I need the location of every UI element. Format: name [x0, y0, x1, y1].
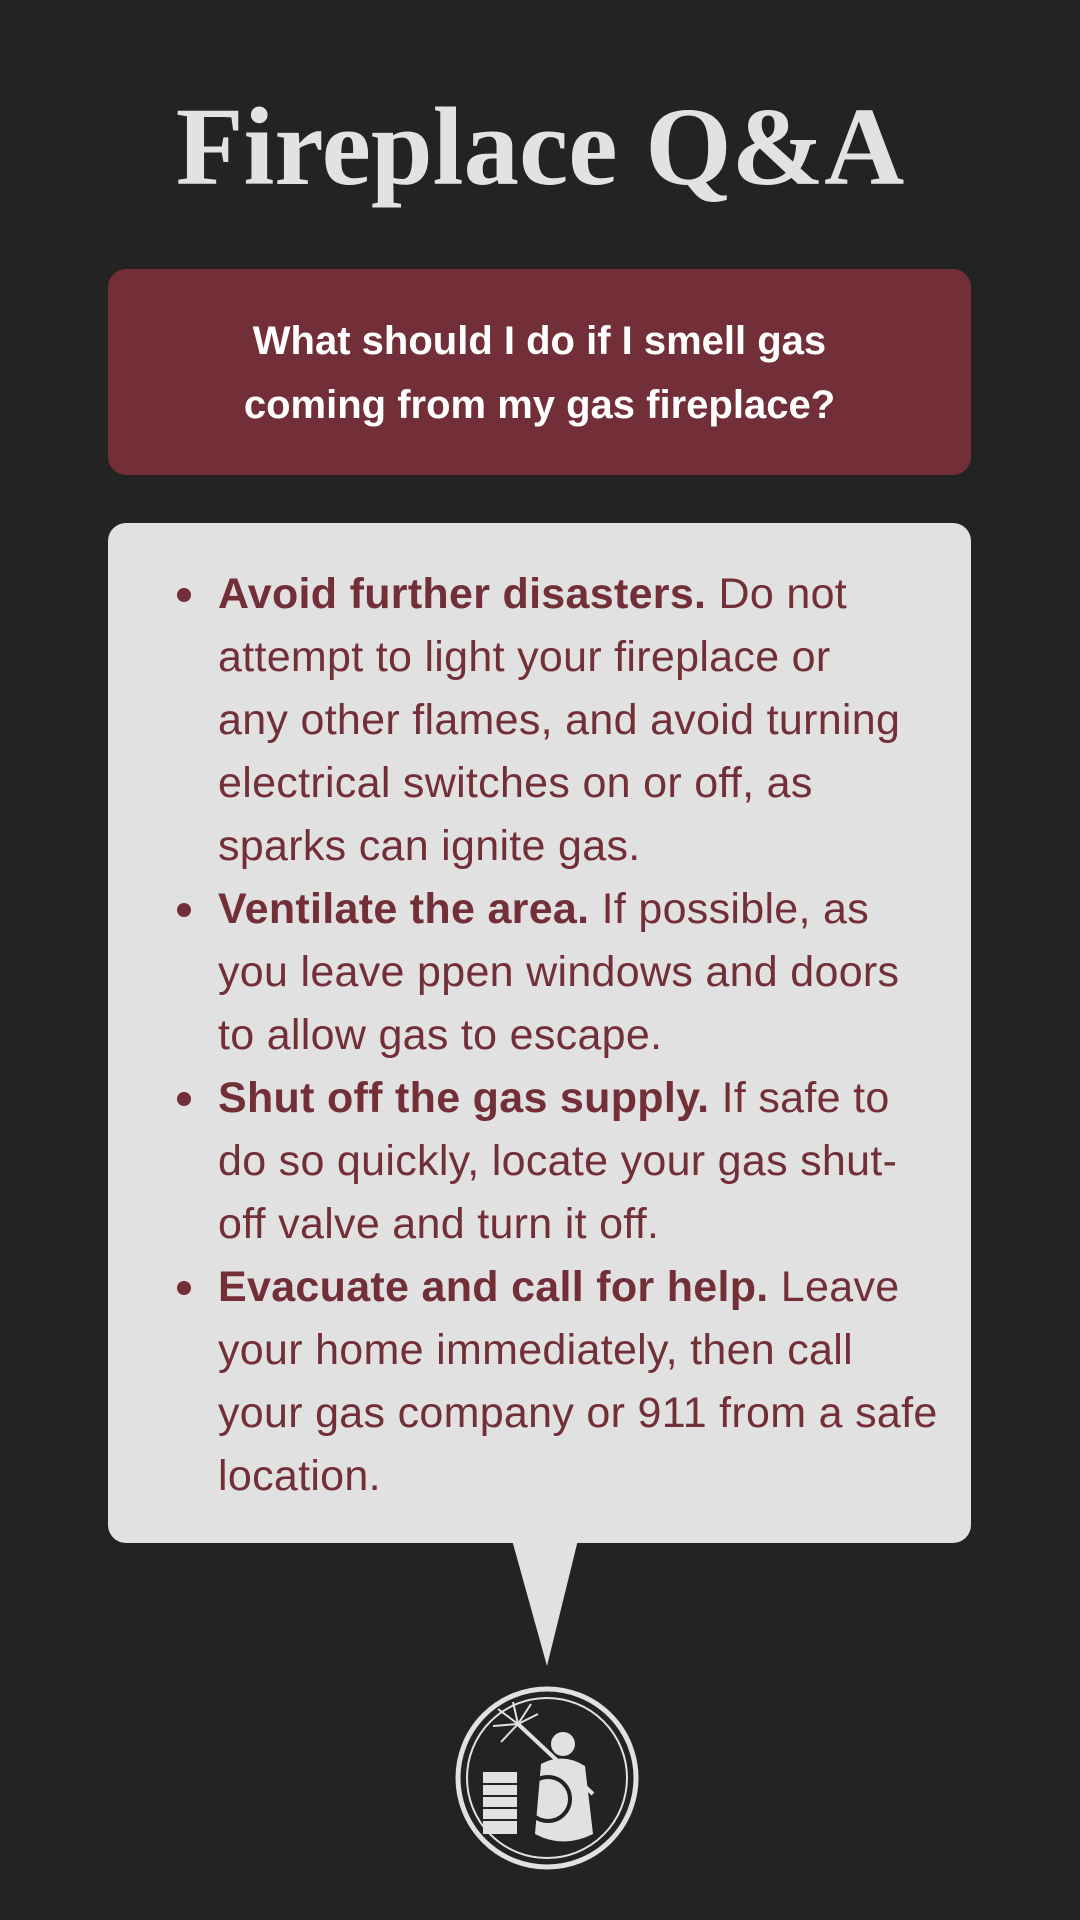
logo: chimney sweep	[456, 1686, 638, 1870]
answer panel	[108, 523, 971, 1543]
item: avoid disasters: attempt to light your fireplace or	[218, 633, 830, 681]
item: avoid disasters: Avoid further disasters. Do not	[218, 570, 847, 618]
item: shut off gas	[218, 1067, 938, 1256]
item: ventilate: to allow gas to escape.	[218, 1011, 662, 1059]
item: shut off gas: Shut off the gas supply. If safe to	[218, 1074, 890, 1122]
item: avoid disasters: any other flames, and avoid turning	[218, 696, 900, 744]
item: evacuate: location.	[218, 1452, 381, 1500]
question box: What should I do if I smell gas	[253, 319, 826, 363]
item: ventilate: Ventilate the area. If possible, as	[218, 885, 869, 933]
answer list	[177, 570, 938, 1500]
item: evacuate: your gas company or 911 from a safe	[218, 1389, 938, 1437]
item: ventilate: you leave ppen windows and doors	[218, 948, 899, 996]
item: shut off gas: do so quickly, locate your gas shut-	[218, 1137, 897, 1185]
item: evacuate: Evacuate and call for help. Leave	[218, 1263, 899, 1311]
item: avoid disasters	[218, 563, 938, 878]
item: avoid disasters: sparks can ignite gas.	[218, 822, 640, 870]
item: evacuate	[218, 1256, 938, 1508]
item: avoid disasters: electrical switches on or off, as	[218, 759, 813, 807]
question box: coming from my gas fireplace?	[244, 383, 835, 427]
item: evacuate: your home immediately, then call	[218, 1326, 853, 1374]
item: ventilate	[218, 878, 938, 1067]
item: shut off gas: off valve and turn it off.	[218, 1200, 659, 1248]
title: Fireplace Q&A	[176, 86, 904, 209]
question box	[108, 269, 971, 475]
